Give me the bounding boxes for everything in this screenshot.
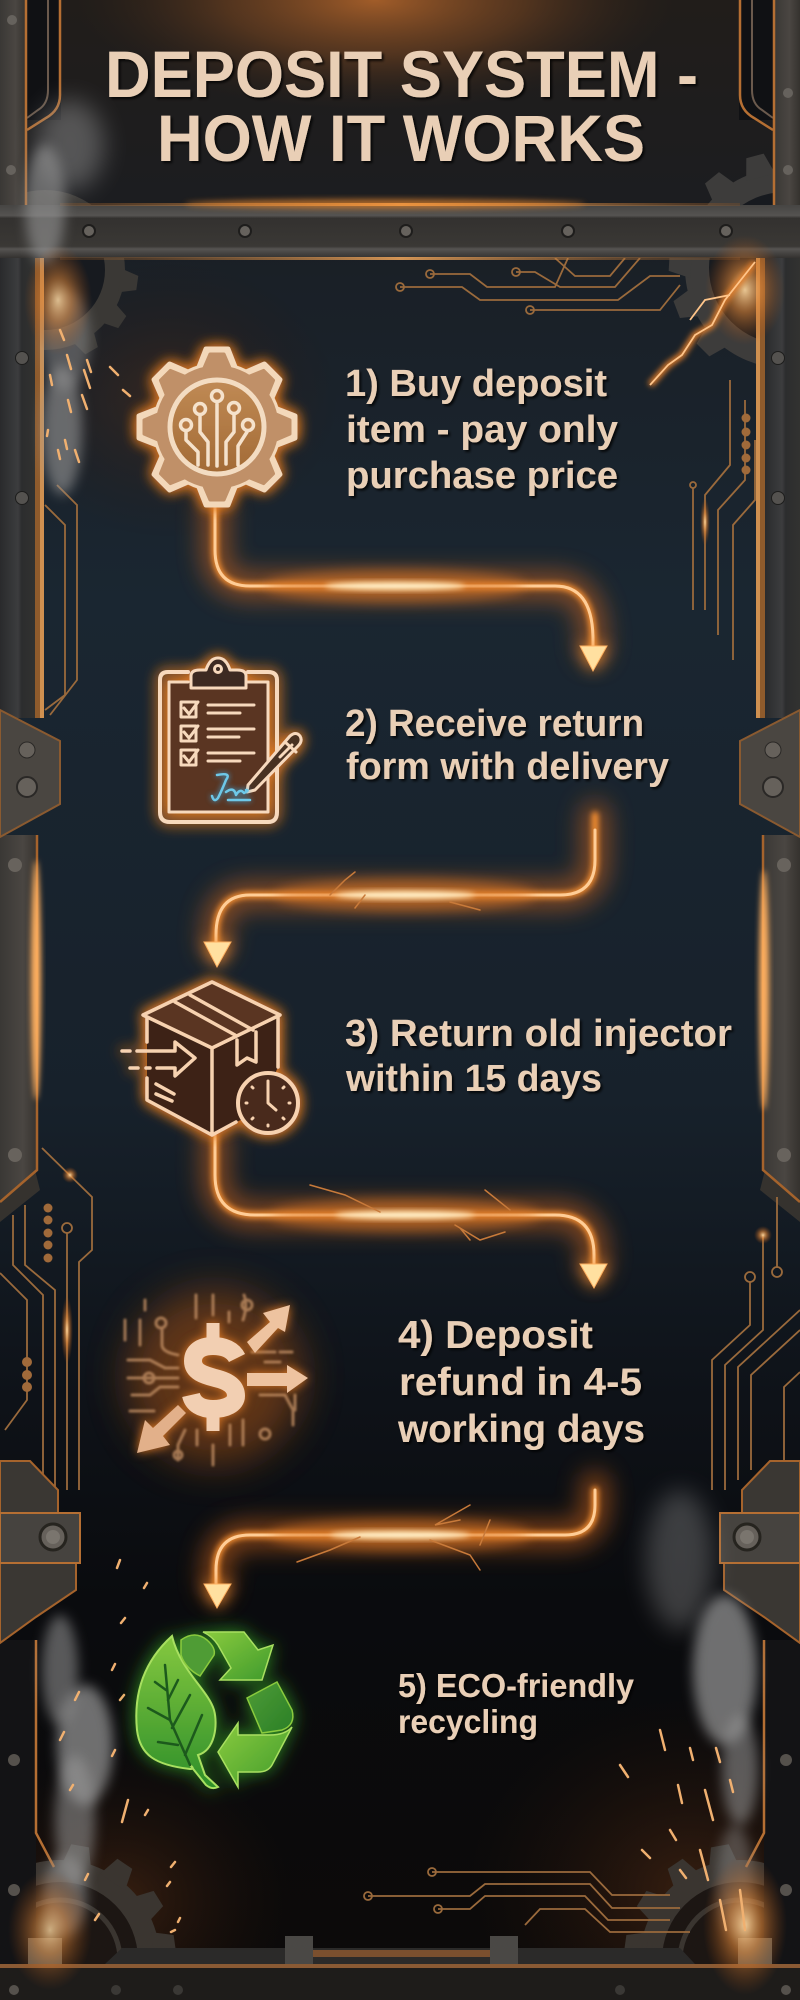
connector 3 [215, 1135, 607, 1288]
connector 2 [204, 815, 595, 967]
step 1 text: purchase price [346, 455, 618, 497]
arrowhead 4 [204, 1584, 231, 1608]
gear: top right background [668, 152, 800, 368]
step 3 text: 3) Return old injector [345, 1013, 732, 1055]
step 3 text: within 15 days [345, 1058, 602, 1100]
icon: gear with circuit [139, 349, 295, 505]
connector 4 [204, 1485, 595, 1608]
step 4 text [397, 1314, 645, 1451]
icon: dollar with arrows [125, 1289, 308, 1465]
title: HOW IT WORKS [157, 101, 645, 175]
top steel bar [0, 199, 800, 260]
side plate: right [740, 710, 800, 837]
arrowhead 2 [204, 942, 231, 967]
step 1 text: item - pay only [346, 409, 618, 451]
gear: bottom left [0, 1843, 177, 2000]
icon: clipboard with pen [160, 658, 301, 822]
step 4 text: refund in 4-5 [399, 1361, 642, 1404]
gear: bottom right [623, 1843, 800, 2000]
step 5 text: 5) ECO-friendly [398, 1667, 635, 1704]
gear: top left background [0, 190, 139, 357]
step 5 text: recycling [398, 1703, 538, 1740]
arrowhead 3 [580, 1264, 607, 1288]
step 4 text: working days [397, 1408, 645, 1451]
top frame [0, 0, 800, 205]
lightning [650, 262, 755, 385]
step 4 text: 4) Deposit [398, 1314, 593, 1357]
step 3 text [345, 1013, 732, 1100]
lower bracket: left [0, 1461, 80, 1643]
lower bracket: right [720, 1461, 800, 1643]
arrowhead 1 [580, 646, 607, 671]
icon: leaf with recycling arrows [136, 1632, 293, 1788]
step 2 text: form with delivery [346, 746, 669, 788]
side plate: left [0, 710, 60, 837]
bottom frame [0, 1936, 800, 2000]
title: DEPOSIT SYSTEM - [105, 37, 698, 111]
icon: package with clock [122, 982, 298, 1135]
connector 1 [215, 505, 607, 671]
step 1 text: 1) Buy deposit [345, 363, 607, 405]
step 1 text [345, 363, 618, 497]
step 2 text: 2) Receive return [345, 703, 644, 745]
step 5 text [398, 1667, 635, 1740]
title [105, 37, 698, 175]
step 2 text [345, 703, 669, 788]
